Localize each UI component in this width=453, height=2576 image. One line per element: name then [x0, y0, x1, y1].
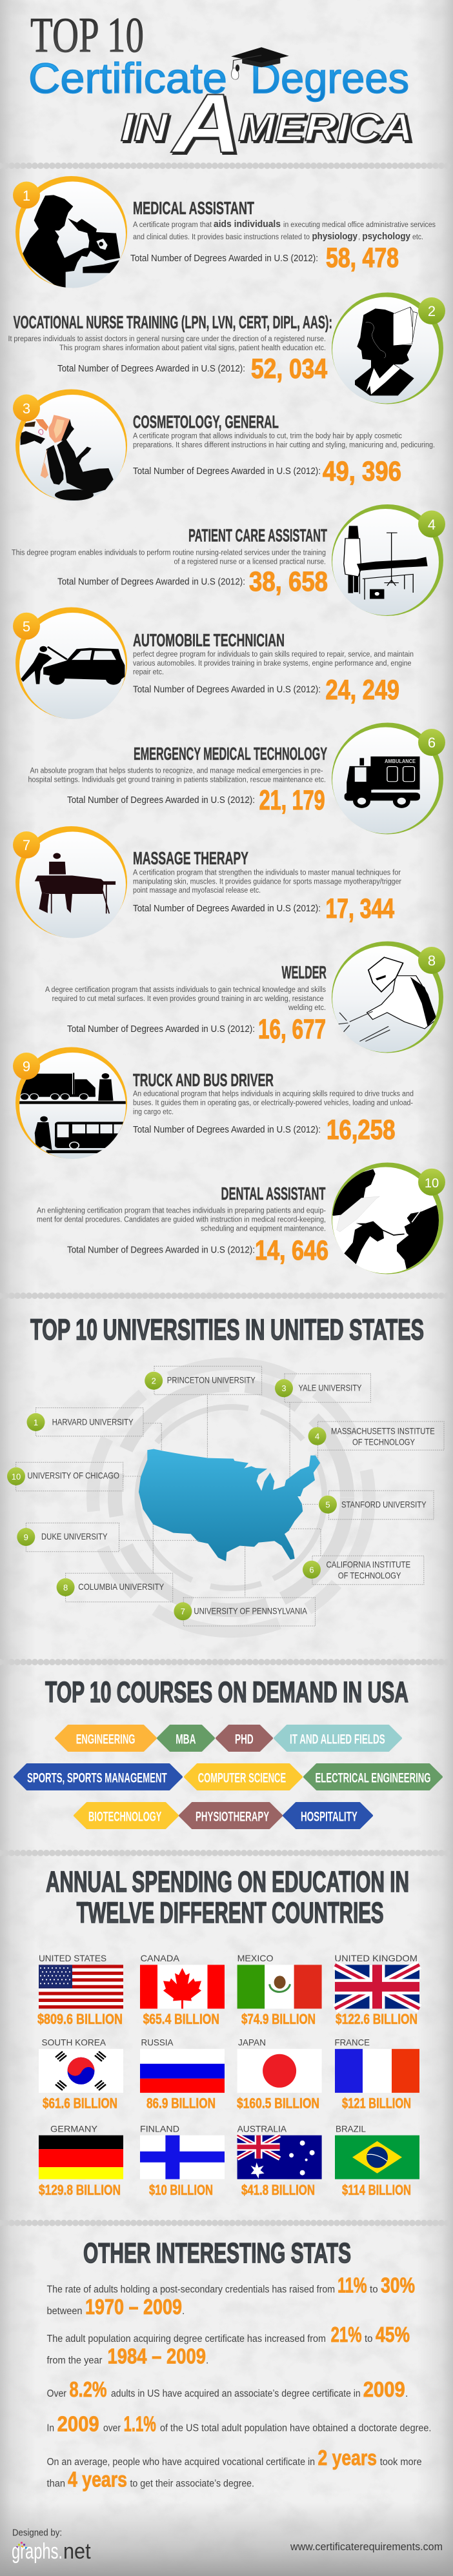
description: preparations. It shares different instructions in hair cutting and styling, manicuring and, pedicuring. — [133, 442, 435, 450]
degree total value: 38, 658 — [249, 566, 328, 597]
ring and photo circle 4 — [332, 504, 445, 616]
country: South Korea: SOUTH KOREA — [41, 2037, 106, 2047]
stat: post-secondary credentials: between — [46, 2306, 83, 2317]
country: Australia — [237, 2123, 322, 2198]
flag: Finland — [140, 2135, 225, 2179]
flag: Russia — [140, 2049, 225, 2093]
university 8: Columbia — [57, 1573, 173, 1602]
degree total label: Total Number of Degrees Awarded in U.S (2012): — [67, 1024, 255, 1035]
description: etc. — [412, 233, 423, 241]
country: South Korea: $61.6 BILLION — [43, 2095, 117, 2112]
stat: adult population: to — [365, 2333, 373, 2344]
degree total value: 17, 344 — [325, 893, 394, 924]
number badge 10 — [418, 1169, 445, 1196]
stat: doctorate degree: 2009 — [57, 2412, 99, 2436]
university 6: Caltech — [303, 1556, 424, 1585]
designed by label: Designed by: — [12, 2527, 62, 2538]
country: Japan: JAPAN — [238, 2037, 266, 2047]
university 6: Caltech: 6 — [309, 1565, 314, 1575]
ring and photo circle 9 — [13, 1047, 127, 1159]
degree total value: 58, 478 — [326, 243, 399, 273]
icon: ambulance — [345, 757, 420, 808]
university 2: Princeton: 2 — [152, 1376, 156, 1385]
description: A degree certification program that assists individuals to gain technical knowledge and skills — [45, 986, 326, 994]
flag: South Korea — [39, 2049, 123, 2093]
description: A certification program that strengthen the individuals to master manual techniques for — [133, 869, 401, 877]
course: Sports, sports management — [15, 1765, 181, 1789]
number badge 1 — [13, 182, 40, 209]
title line: in America: MERICA — [240, 108, 415, 151]
degree total value: 16,258 — [327, 1115, 395, 1145]
heading: AUTOMOBILE TECHNICIAN — [133, 630, 285, 650]
panel: patient care assistant — [12, 504, 445, 616]
panel: other interesting stats — [46, 2237, 431, 2491]
heading: MEDICAL ASSISTANT — [133, 198, 254, 218]
description: perfect degree program for individuals to gain skills required to repair, service, and maintain — [133, 651, 414, 659]
number badge 3 — [13, 395, 40, 422]
icon: graduation cap — [231, 47, 289, 79]
icon: truck and bus — [17, 1073, 127, 1153]
degree total value: 16, 677 — [258, 1014, 326, 1045]
flag: United States — [39, 1965, 123, 2008]
number badge 2: 2 — [428, 303, 436, 319]
degree total label: Total Number of Degrees Awarded in U.S (2012): — [130, 253, 318, 264]
country: South Korea — [39, 2037, 123, 2112]
description — [133, 433, 435, 450]
degree total value: 24, 249 — [325, 675, 399, 706]
icon: nurse beside hospital bed — [344, 526, 428, 600]
panel: cosmetology — [13, 390, 435, 501]
panel: truck and bus driver — [13, 1047, 414, 1159]
degree total label: Total Number of Degrees Awarded in U.S (2012): — [67, 1245, 255, 1256]
university 7: Pennsylvania — [174, 1598, 315, 1626]
stat: associate's degree: 2009 — [363, 2377, 405, 2401]
country: Finland: $10 BILLION — [149, 2182, 213, 2198]
description: A certificate program that allows individuals to cut, trim the body hair by apply cosmetic — [133, 433, 402, 441]
university 5: Stanford: STANFORD UNIVERSITY — [341, 1499, 427, 1509]
description — [37, 1207, 326, 1233]
panel: emergency medical technology — [28, 722, 445, 835]
stat: vocational certificate years: 4 years — [68, 2467, 127, 2491]
ring and photo circle 10 — [331, 1162, 445, 1274]
degree total label: Total Number of Degrees Awarded in U.S (2012): — [133, 904, 321, 914]
heading: WELDER — [281, 962, 327, 982]
course: Engineering — [56, 1726, 156, 1750]
country: France: FRANCE — [334, 2037, 370, 2047]
stat: post-secondary credentials: 1970 – 2009 — [85, 2295, 182, 2319]
icon: dentist and patient — [331, 1169, 440, 1269]
stat: doctorate degree: over — [103, 2423, 121, 2434]
description: welding etc. — [288, 1004, 326, 1012]
icon: hair stylist and client — [21, 415, 114, 500]
icon: mechanic and car — [21, 646, 125, 685]
description: An enlightening certification program that teaches individuals in preparing patients and equip- — [37, 1207, 326, 1215]
degree total label: Total Number of Degrees Awarded in U.S (2012): — [57, 577, 245, 587]
description: It prepares individuals to assist doctors in general nursing care under the direction of a registered nurse. — [8, 335, 326, 343]
country: United States: UNITED STATES — [39, 1953, 106, 1963]
number badge 8 — [418, 947, 445, 974]
country: France: $121 BILLION — [342, 2095, 411, 2112]
icon: ambulance: AMBULANCE — [385, 758, 416, 764]
course: MBA — [158, 1726, 214, 1750]
university 7: Pennsylvania: UNIVERSITY OF PENNSYLVANIA — [194, 1605, 307, 1616]
panel: top 10 universities — [7, 1313, 444, 1632]
stat: doctorate degree: 1.1% — [124, 2412, 156, 2436]
country: Australia: $41.8 BILLION — [241, 2182, 315, 2198]
country: Finland — [140, 2123, 225, 2198]
number badge 10: 10 — [425, 1176, 439, 1191]
title line: in America: MERICA — [238, 106, 413, 149]
description: in executing medical office administrative services — [283, 221, 436, 229]
heading: TRUCK AND BUS DRIVER — [133, 1070, 274, 1090]
footer — [12, 2527, 443, 2564]
country: Mexico — [237, 1953, 322, 2027]
country: United Kingdom: UNITED KINGDOM — [334, 1953, 418, 1963]
country: Canada: CANADA — [141, 1953, 180, 1963]
course: Biotechnology: BIOTECHNOLOGY — [88, 1809, 161, 1824]
university 3: Yale — [275, 1374, 370, 1402]
country: Germany — [39, 2123, 123, 2198]
panel: massage therapy — [13, 826, 401, 938]
description — [133, 869, 401, 895]
description — [133, 1090, 414, 1116]
logo: graphs.net: net — [63, 2539, 91, 2564]
description: A certificate program that — [133, 221, 212, 229]
flag: Japan — [237, 2049, 322, 2093]
degree total label: Total Number of Degrees Awarded in U.S (2012): — [133, 685, 321, 695]
course: Physiotherapy — [180, 1803, 281, 1828]
university 3: Yale: 3 — [281, 1383, 287, 1393]
course: Hospitality — [284, 1803, 372, 1828]
university 10: Chicago — [7, 1462, 123, 1491]
description: of a registered nurse or a licensed practical nurse. — [174, 559, 326, 566]
course: Engineering: ENGINEERING — [76, 1732, 136, 1747]
university 10: Chicago: UNIVERSITY OF CHICAGO — [27, 1471, 119, 1481]
stat: associate's degree: Over — [46, 2388, 66, 2399]
university 1: Harvard: 1 — [34, 1418, 38, 1427]
number badge 5: 5 — [23, 619, 30, 635]
title line: Certificate Degrees: Certificate — [28, 54, 227, 102]
description — [12, 550, 326, 566]
number badge 4 — [418, 511, 445, 538]
description — [45, 986, 326, 1012]
university 5: Stanford — [319, 1491, 434, 1520]
stat: post-secondary credentials: 30% — [381, 2273, 415, 2297]
panel: annual spending on education — [37, 1865, 419, 2198]
stat: adult population: 1984 – 2009 — [107, 2344, 206, 2368]
title — [28, 7, 415, 172]
university 8: Columbia: 8 — [63, 1583, 68, 1592]
stat: adult population: The adult population acquiring degree certificate has increased from — [46, 2333, 326, 2344]
description: An educational program that helps individuals in acquiring skills required to drive trucks and — [133, 1090, 414, 1098]
course: Physiotherapy: PHYSIOTHERAPY — [196, 1809, 269, 1824]
description — [28, 768, 326, 784]
university 3: Yale: YALE UNIVERSITY — [298, 1383, 362, 1393]
stat: vocational certificate years: On an average, people who have acquired vocational certificate in — [46, 2457, 315, 2468]
university 2: Princeton: PRINCETON UNIVERSITY — [167, 1375, 256, 1385]
flag: Australia — [237, 2135, 322, 2179]
description — [8, 335, 326, 352]
number badge 7 — [13, 831, 40, 858]
course: Computer science: COMPUTER SCIENCE — [198, 1770, 286, 1785]
course: Sports, sports management: SPORTS, SPORTS MANAGEMENT — [27, 1770, 167, 1785]
university 4: MIT: OF TECHNOLOGY — [352, 1436, 416, 1447]
university 9: Duke: 9 — [24, 1532, 28, 1542]
number badge 8: 8 — [428, 953, 436, 969]
icon: welder — [338, 957, 436, 1042]
university 1: Harvard: HARVARD UNIVERSITY — [52, 1416, 134, 1427]
stat: associate's degree: 8.2% — [70, 2377, 107, 2401]
description — [133, 219, 436, 242]
university 4: MIT: 4 — [315, 1432, 319, 1441]
stat: associate's degree — [46, 2377, 408, 2401]
number badge 9 — [13, 1053, 40, 1080]
ring and photo circle 5 — [13, 608, 127, 719]
flag: United Kingdom — [335, 1965, 419, 2008]
logo: graphs.net: graphs. — [12, 2539, 63, 2564]
course: IT and allied fields — [275, 1726, 401, 1750]
university 9: Duke: DUKE UNIVERSITY — [41, 1531, 108, 1541]
description: hospital settings. Individuals get ground training in patients stabilization, rescue maintenance etc. — [28, 777, 326, 784]
degree total label: Total Number of Degrees Awarded in U.S (2012): — [67, 795, 255, 806]
stat: post-secondary credentials: 11% — [337, 2273, 367, 2297]
country: Germany: $129.8 BILLION — [39, 2182, 121, 2198]
panel: dental assistant — [37, 1162, 445, 1274]
university 1: Harvard — [27, 1408, 143, 1436]
country: Australia: AUSTRALIA — [237, 2123, 287, 2134]
number badge 6 — [418, 729, 445, 756]
country: United Kingdom — [334, 1953, 419, 2027]
description: scheduling and equipment maintenance. — [201, 1225, 326, 1233]
title line: in America — [121, 76, 415, 172]
country: Finland: FINLAND — [140, 2123, 179, 2134]
heading: COSMETOLOGY, GENERAL — [133, 412, 279, 432]
course: Biotechnology — [75, 1803, 177, 1828]
description: required to cut metal surfaces. It even provides ground training in arc welding, resistance — [52, 995, 324, 1003]
description: aids individuals — [214, 219, 281, 230]
flag: Canada — [140, 1965, 225, 2008]
icon: massage table — [35, 853, 116, 913]
description: This degree program enables individuals to perform routine nursing-related services under the training — [12, 550, 326, 557]
course: IT and allied fields: IT AND ALLIED FIELDS — [290, 1732, 385, 1747]
panel: vocational nurse training — [8, 293, 445, 404]
title line: in America: A — [171, 76, 241, 170]
stat: post-secondary credentials: . — [182, 2306, 185, 2317]
degree total value: 49, 396 — [323, 456, 401, 487]
panel: automobile technician — [13, 608, 414, 719]
country: Brazil: $114 BILLION — [342, 2182, 411, 2198]
country: United States: $809.6 BILLION — [37, 2011, 123, 2027]
degree total value: 52, 034 — [251, 353, 327, 384]
description: physiology — [312, 231, 358, 242]
description: and clinical duties. It provides basic instructions related to — [133, 233, 310, 241]
country: Russia: RUSSIA — [141, 2037, 174, 2047]
stat: adult population: 21% — [331, 2323, 362, 2346]
degree total label: Total Number of Degrees Awarded in U.S (2012): — [57, 364, 245, 374]
stat: vocational certificate years: to get their associate’s degree. — [130, 2478, 254, 2489]
course: Electrical engineering — [305, 1765, 441, 1789]
university 6: Caltech: CALIFORNIA INSTITUTE — [327, 1559, 410, 1569]
country: Russia: 86.9 BILLION — [146, 2095, 216, 2112]
number badge 3: 3 — [23, 401, 30, 417]
stat: doctorate degree: of the US total adult population have obtained a doctorate degree. — [160, 2423, 431, 2434]
country: Canada — [140, 1953, 225, 2027]
stat: doctorate degree: In — [46, 2423, 54, 2434]
country: Mexico: $74.9 BILLION — [241, 2011, 316, 2027]
heading: PATIENT CARE ASSISTANT — [188, 526, 327, 546]
ring and photo circle 8 — [332, 942, 445, 1053]
map of United States — [139, 1449, 320, 1561]
description: point massage and myofascial release etc. — [133, 887, 261, 895]
heading — [46, 1865, 409, 1929]
title line: in America: A — [173, 78, 243, 172]
university 2: Princeton — [145, 1366, 262, 1394]
university 7: Pennsylvania: 7 — [181, 1607, 185, 1616]
panel: welder — [45, 942, 445, 1053]
stat: associate's degree: adults in US have acquired an associate’s degree certificate in — [111, 2388, 361, 2399]
degree total label: Total Number of Degrees Awarded in U.S (2012): — [133, 466, 321, 477]
university 4: MIT — [308, 1422, 444, 1450]
title line: Certificate Degrees: Degrees — [250, 54, 409, 102]
stat: vocational certificate years — [46, 2446, 422, 2491]
connector lines — [119, 1394, 321, 1596]
title line: Top 10: TOP 10 — [30, 7, 144, 63]
title line: in America: IN — [121, 106, 169, 149]
icon: nurse profile — [355, 307, 418, 395]
degree total label: Total Number of Degrees Awarded in U.S (2012): — [133, 1125, 321, 1135]
country: Canada: $65.4 BILLION — [143, 2011, 219, 2027]
stat: vocational certificate years: 2 years — [317, 2446, 377, 2470]
number badge 9: 9 — [23, 1058, 30, 1075]
flag: Germany — [39, 2135, 123, 2179]
title line: Certificate Degrees — [28, 54, 409, 102]
stat: adult population — [46, 2323, 410, 2368]
number badge 5 — [13, 613, 40, 640]
country: United Kingdom: $122.6 BILLION — [336, 2011, 418, 2027]
description: , — [358, 233, 360, 241]
course: PHD: PHD — [235, 1732, 254, 1747]
university 10: Chicago: 10 — [12, 1472, 21, 1481]
number badge 2 — [418, 297, 445, 324]
title line: in America: IN — [123, 108, 171, 151]
stat: post-secondary credentials — [46, 2273, 415, 2319]
country: France — [334, 2037, 419, 2112]
stat: adult population: . — [206, 2355, 208, 2366]
decorative gear rings — [93, 1363, 369, 1632]
description: This program shares information about patient vital signs, patient health education etc. — [59, 344, 326, 352]
panel: top 10 courses — [15, 1676, 441, 1828]
heading: DENTAL ASSISTANT — [221, 1184, 325, 1204]
country: Japan — [237, 2037, 322, 2112]
stat: vocational certificate years: than — [46, 2478, 65, 2489]
heading: MASSAGE THERAPY — [133, 848, 248, 868]
flag: Mexico — [237, 1965, 322, 2008]
ring and photo circle 1 — [13, 176, 127, 288]
website url: www.certificaterequirements.com — [290, 2541, 443, 2553]
course: MBA: MBA — [176, 1732, 196, 1747]
course: PHD — [217, 1726, 272, 1750]
description: psychology — [362, 231, 411, 242]
course: Computer science — [185, 1765, 301, 1789]
description: manipulating skin, muscles. It provides guidance for sports massage myotherapy/trigger — [133, 878, 401, 886]
university 9: Duke — [17, 1523, 119, 1552]
stat: adult population: from the year — [46, 2355, 102, 2366]
stat: post-secondary credentials: to — [370, 2284, 378, 2295]
flag: Brazil — [335, 2135, 419, 2179]
ring and photo circle 7 — [13, 826, 127, 938]
country: Mexico: MEXICO — [237, 1953, 274, 1963]
stat: doctorate degree — [46, 2412, 431, 2436]
description: ment for dental procedures. Candidates are guided with instruction in medical record-keeping, — [37, 1216, 326, 1224]
stat: post-secondary credentials: The rate of adults holding a post-secondary credentials has raised from — [46, 2284, 335, 2295]
number badge 7: 7 — [23, 837, 30, 853]
panel: medical assistant — [13, 176, 436, 288]
degree total value: 14, 646 — [255, 1235, 328, 1266]
flag: France — [335, 2049, 419, 2093]
country: Brazil — [335, 2123, 419, 2198]
ring and photo circle 2 — [332, 293, 445, 404]
description: ing cargo etc. — [133, 1108, 174, 1116]
country: Brazil: BRAZIL — [336, 2123, 366, 2134]
country: Japan: $160.5 BILLION — [237, 2095, 319, 2112]
university 8: Columbia: COLUMBIA UNIVERSITY — [78, 1581, 165, 1592]
description — [133, 651, 414, 677]
country: Germany: GERMANY — [50, 2123, 98, 2134]
stat: adult population: 45% — [376, 2323, 410, 2346]
ring and photo circle 3 — [13, 390, 127, 501]
ring and photo circle 6 — [332, 722, 445, 835]
degree total value: 21, 179 — [259, 785, 325, 816]
description: An absolute program that helps students to recognize, and manage medical emergencies in pre- — [30, 768, 323, 775]
number badge 1: 1 — [23, 188, 30, 204]
number badge 6: 6 — [428, 735, 436, 751]
country: United States — [37, 1953, 123, 2027]
course: Hospitality: HOSPITALITY — [301, 1809, 357, 1824]
description: various automobiles. It provides training in brake systems, engine performance and, engine — [133, 660, 412, 668]
description: buses. It guides them in operating gas, or electrically-powered vehicles, loading and unload- — [133, 1099, 413, 1107]
country: Russia — [140, 2037, 225, 2112]
description: repair etc. — [133, 669, 164, 677]
university 6: Caltech: OF TECHNOLOGY — [338, 1570, 401, 1581]
stat: associate's degree: . — [405, 2388, 408, 2399]
icon: medical worker at microscope — [23, 195, 120, 288]
number badge 4: 4 — [428, 517, 436, 533]
university 5: Stanford: 5 — [325, 1500, 330, 1509]
stat: vocational certificate years: took more — [380, 2457, 422, 2468]
